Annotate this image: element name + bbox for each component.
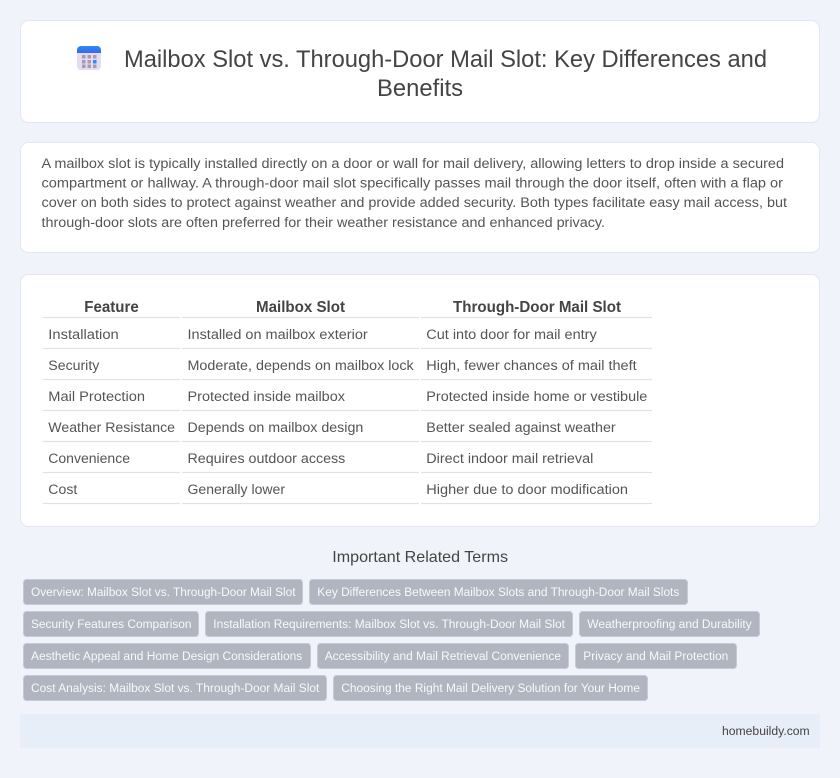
table row: convenience: Direct indoor mail retrieval bbox=[426, 451, 593, 467]
footer bbox=[20, 714, 820, 748]
tag: overview: Overview: Mailbox Slot vs. Through-Door Mail Slot bbox=[31, 585, 296, 599]
tag: key differences bbox=[310, 580, 688, 604]
icon: calendar bbox=[77, 46, 101, 70]
footer: homebuildy.com bbox=[722, 724, 810, 738]
text block: summary paragraph: compartment or hallway. A through-door mail slot specifically passes mail through the door itself, often with a flap or bbox=[42, 176, 783, 192]
heading: important related terms: Important Related Terms bbox=[332, 549, 508, 566]
table row: installation: Installed on mailbox exterior bbox=[188, 327, 368, 343]
panel: comparison table bbox=[20, 274, 820, 526]
table row: cost bbox=[48, 482, 628, 498]
title: Mailbox Slot vs. Through-Door Mail Slot: Key Differences and bbox=[124, 46, 767, 73]
tag: overview bbox=[24, 580, 302, 604]
table row: cost: Higher due to door modification bbox=[426, 482, 628, 498]
table row: installation: Cut into door for mail entry bbox=[426, 327, 598, 343]
tag: privacy: Privacy and Mail Protection bbox=[583, 649, 728, 663]
table row: security: High, fewer chances of mail theft bbox=[426, 358, 637, 374]
table row: security: Security bbox=[48, 358, 100, 374]
table row: mail protection bbox=[48, 389, 647, 405]
table row: weather resistance: Weather Resistance bbox=[48, 420, 175, 436]
tag: installation requirements bbox=[206, 612, 572, 636]
text block: summary paragraph bbox=[42, 156, 787, 231]
table row: security: Moderate, depends on mailbox lock bbox=[188, 358, 415, 374]
panel: related term tags bbox=[24, 580, 760, 700]
tag: accessibility bbox=[318, 644, 568, 668]
tag: choosing solution bbox=[334, 676, 648, 700]
table row: cost: Cost bbox=[48, 482, 77, 498]
table row: cost: Generally lower bbox=[188, 482, 285, 498]
title bbox=[124, 46, 767, 102]
tag: aesthetic appeal: Aesthetic Appeal and Home Design Considerations bbox=[31, 649, 302, 663]
table row: weather resistance: Better sealed against weather bbox=[426, 420, 616, 436]
tag: key differences: Key Differences Between Mailbox Slots and Through-Door Mail Slots bbox=[317, 585, 679, 599]
table row: convenience: Convenience bbox=[48, 451, 130, 467]
panel: header bbox=[20, 20, 820, 122]
table header row: Mailbox Slot bbox=[256, 299, 346, 316]
tag: weatherproofing: Weatherproofing and Durability bbox=[587, 617, 753, 631]
table header row: Through-Door Mail Slot bbox=[453, 299, 622, 316]
table row: installation bbox=[48, 327, 598, 343]
table row: mail protection: Mail Protection bbox=[48, 389, 145, 405]
table row: installation: Installation bbox=[48, 327, 119, 343]
table row: weather resistance bbox=[48, 420, 616, 436]
table row: convenience: Requires outdoor access bbox=[188, 451, 345, 467]
text block: summary paragraph: cover on both sides to protect against weather and provide added security. Both types facilitate easy mail access, but bbox=[42, 195, 787, 211]
tag: security features: Security Features Comparison bbox=[31, 617, 192, 631]
panel: summary bbox=[20, 142, 820, 252]
table row: mail protection: Protected inside home or vestibule bbox=[426, 389, 647, 405]
text block: summary paragraph: A mailbox slot is typically installed directly on a door or wall for mail delivery, allowing letters to drop inside a secured bbox=[42, 156, 784, 172]
tag: accessibility: Accessibility and Mail Retrieval Convenience bbox=[325, 649, 561, 663]
tag: aesthetic appeal bbox=[24, 644, 310, 668]
tag: weatherproofing bbox=[580, 612, 760, 636]
table row: security bbox=[48, 358, 637, 374]
title: Benefits bbox=[377, 75, 463, 102]
tag: cost analysis: Cost Analysis: Mailbox Slot vs. Through-Door Mail Slot bbox=[31, 681, 320, 695]
table row: mail protection: Protected inside mailbox bbox=[188, 389, 345, 405]
tag: cost analysis bbox=[24, 676, 326, 700]
text block: summary paragraph: through-door slots are often preferred for their weather resistance and enhanced privacy. bbox=[42, 215, 605, 231]
table header row: Feature bbox=[84, 299, 139, 316]
tag: installation requirements: Installation Requirements: Mailbox Slot vs. Through-Door Mail Slot bbox=[213, 617, 566, 631]
tag: security features bbox=[24, 612, 198, 636]
table row: convenience bbox=[48, 451, 593, 467]
tag: choosing solution: Choosing the Right Mail Delivery Solution for Your Home bbox=[341, 681, 640, 695]
table header row bbox=[84, 299, 622, 316]
tag: privacy bbox=[576, 644, 736, 668]
table row: weather resistance: Depends on mailbox design bbox=[188, 420, 363, 436]
